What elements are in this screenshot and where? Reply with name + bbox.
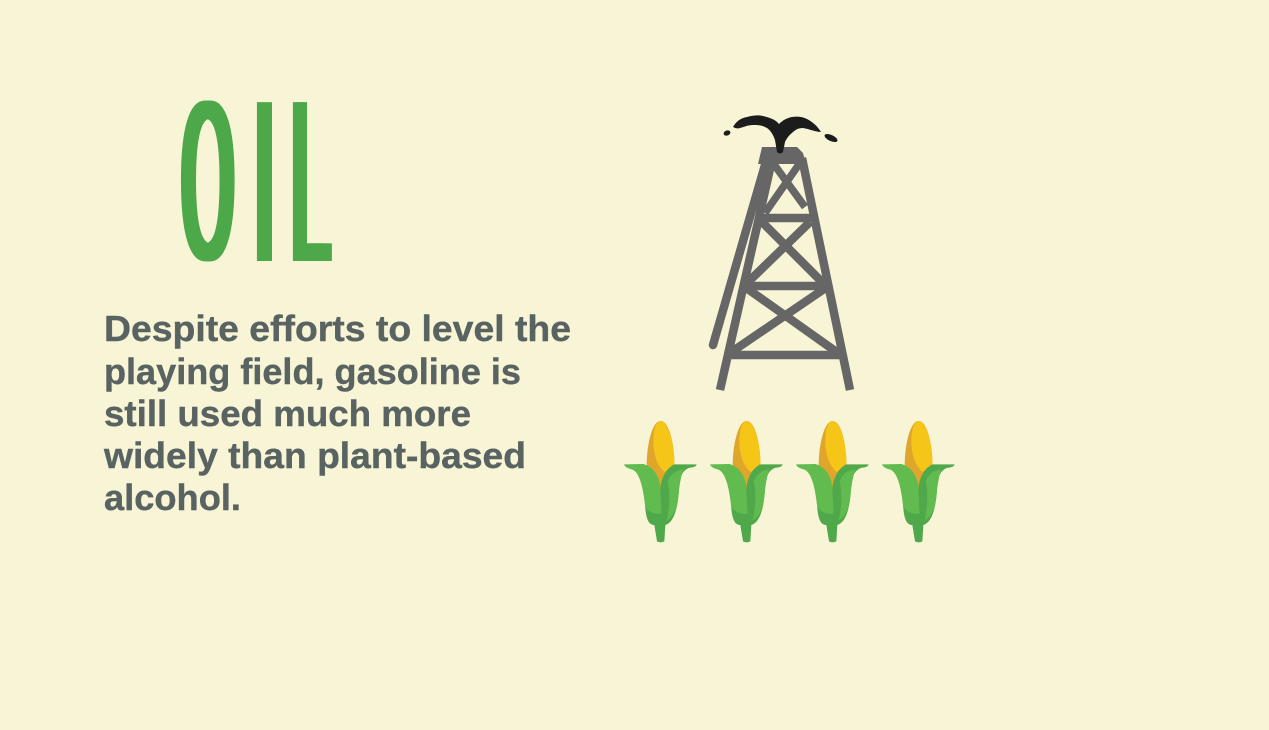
title	[179, 52, 332, 331]
corn 2	[710, 421, 783, 542]
corn 3	[796, 421, 869, 542]
corn 1	[624, 421, 697, 542]
description text: alcohol.	[104, 477, 241, 518]
description text: still used much more	[104, 393, 471, 434]
description text	[103, 308, 571, 518]
icon: corn row	[624, 421, 955, 542]
description text: widely than plant-based	[103, 435, 526, 476]
corn 4	[882, 421, 955, 542]
title: L	[287, 52, 327, 310]
derrick frame	[713, 147, 850, 390]
description text: Despite efforts to level the	[104, 308, 571, 349]
oil gush	[723, 115, 839, 154]
title: O	[179, 63, 237, 331]
description text: playing field, gasoline is	[104, 351, 521, 392]
icon: oil derrick	[713, 115, 850, 390]
title: I	[242, 52, 287, 310]
